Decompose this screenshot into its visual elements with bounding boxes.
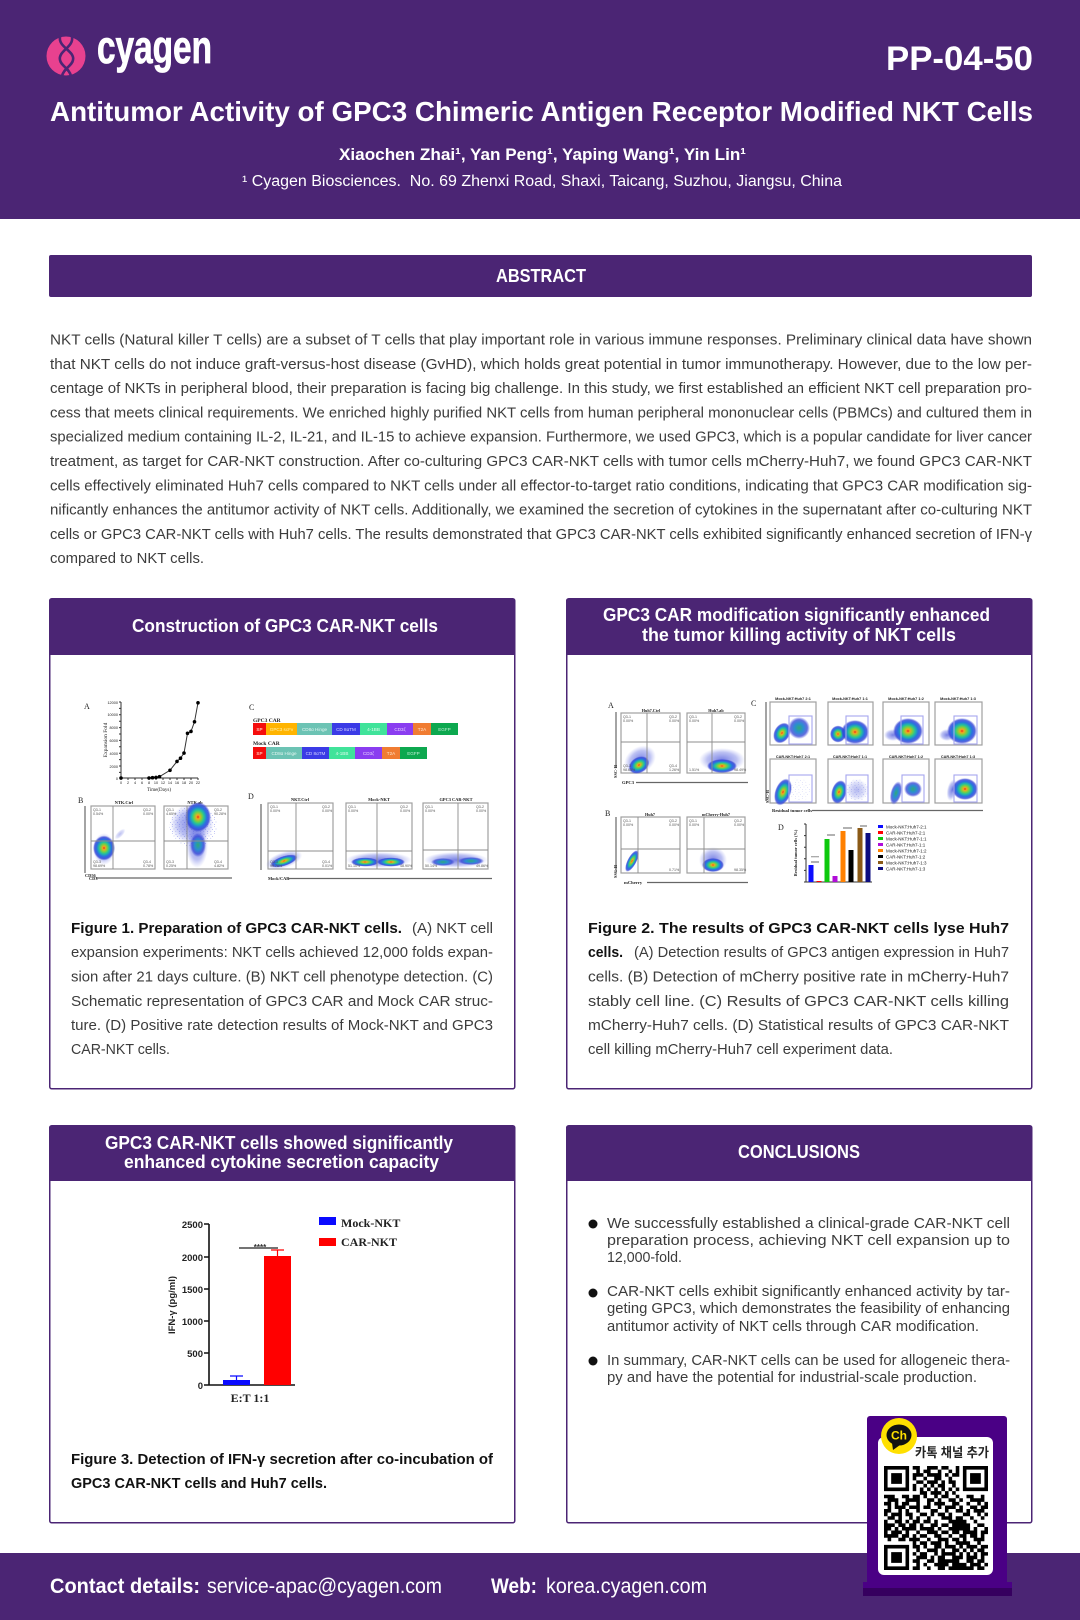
chart C: killing flow plots: Mock-NKT:Huh7 1:2	[888, 697, 924, 701]
chart: IFN-gamma secretion: IFN-γ (pg/ml)	[167, 1276, 178, 1334]
figure 2 caption: stably cell line. (C) Results of GPC3 CAR-NKT cells killing	[588, 993, 1009, 1010]
chart D: CAR positive rate flow plots: Q3-2	[400, 805, 408, 809]
chart A: expansion curve: 6	[141, 781, 143, 785]
chart B: mCherry flow plots: 98.35%	[734, 868, 747, 872]
conclusion 1: 12,000-fold.	[607, 1250, 682, 1266]
chart D: CAR positive rate flow plots: 0.00%	[322, 809, 333, 813]
contact details	[50, 1575, 442, 1598]
chart A: GPC3 expression flow plots: 0.00%	[689, 719, 700, 723]
chart B: NKT phenotype flow plots: 0.54%	[93, 812, 104, 816]
chart C: killing flow plots: Residual tumor cells	[772, 808, 812, 813]
chart A: GPC3 expression flow plots: GPC3	[622, 780, 635, 785]
chart A: expansion curve: 12000	[107, 701, 118, 705]
chart A: expansion curve: 8000	[110, 726, 118, 730]
chart A: GPC3 expression flow plots: 0.00%	[734, 719, 745, 723]
chart B: NKT phenotype flow plots: Q3-3	[93, 860, 101, 864]
panel: conclusions	[566, 1126, 1032, 1523]
chart D legend: CAR-NKT:Huh7-1:3	[886, 866, 926, 872]
chart B: mCherry flow plots: 0.00%	[669, 823, 680, 827]
chart D: CAR positive rate flow plots: D	[248, 792, 254, 801]
chart C: killing flow plots: CAR-NKT:Huh7 2:1	[776, 755, 810, 759]
chart B: NKT phenotype flow plots: 0.25%	[166, 864, 177, 868]
chart B: NKT phenotype flow plots: 4.65%	[166, 812, 177, 816]
chart legend: Mock-NKT	[341, 1216, 400, 1230]
chart B: NKT phenotype flow plots: Q3-3	[166, 860, 174, 864]
chart A: GPC3 expression flow plots: Q3-2	[734, 715, 742, 719]
chart D: CAR positive rate flow plots: Q3-3	[270, 860, 278, 864]
chart A: expansion curve: 16	[175, 781, 179, 785]
chart: IFN-gamma secretion: 2500	[182, 1220, 203, 1231]
figure 2 caption: Figure 2. The results of GPC3 CAR-NKT cells lyse Huh7	[588, 920, 1009, 937]
chart D: residual tumor cells bars: D	[778, 823, 784, 832]
chart A: expansion curve: A	[84, 702, 90, 711]
chart B: NKT phenotype flow plots: 0.00%	[143, 812, 154, 816]
chart B: mCherry flow plots: mCherry-Huh7	[702, 812, 730, 817]
chart B: NKT phenotype flow plots: B	[78, 796, 83, 805]
chart D: CAR positive rate flow plots: 0.00%	[400, 809, 411, 813]
chart B: NKT phenotype flow plots: CD56	[85, 873, 97, 878]
panel: tumor killing activity	[566, 599, 1032, 1089]
figure 1 caption: sion after 21 days culture. (B) NKT cell phenotype detection. (C)	[71, 968, 493, 986]
figure 1 caption: Figure 1. Preparation of GPC3 CAR-NKT cells.	[71, 920, 402, 937]
diagram C: CAR structure: CD8α Hinge	[302, 727, 328, 732]
chart D: CAR positive rate flow plots: Q3-2	[322, 805, 330, 809]
diagram C: CAR structure: SP	[256, 727, 263, 732]
chart A: GPC3 expression flow plots: 1.26%	[669, 768, 680, 772]
chart A: expansion curve: 12	[161, 781, 165, 785]
chart: IFN-gamma secretion: E:T 1:1	[231, 1391, 269, 1405]
bar: Mock-NKT	[223, 1376, 250, 1385]
chart D: CAR positive rate flow plots: 49.86%	[476, 864, 489, 868]
diagram C: CAR structure: CD3ζ	[394, 727, 406, 733]
conclusion 3: py and have the potential for industrial-scale production.	[607, 1370, 977, 1386]
chart B: mCherry flow plots: Q3-2	[734, 819, 742, 823]
chart A: expansion curve: Time(Days)	[147, 788, 171, 793]
chart D: CAR positive rate flow plots: 51.10%	[348, 864, 361, 868]
chart A: GPC3 expression flow plots: Q3-2	[669, 715, 677, 719]
diagram C: CAR structure: T2A	[387, 751, 396, 756]
chart B: mCherry flow plots: 0.00%	[623, 823, 634, 827]
chart D legend: CAR-NKT:Huh7-1:1	[886, 842, 926, 848]
figure 1 caption: CAR-NKT cells.	[71, 1041, 170, 1058]
abstract text: cess that meets clinical requirements. We enriched highly purified NKT cells from human peripheral mononuclear cells (PBMCs) and cultured them in	[50, 404, 1032, 421]
conclusion 3: In summary, CAR-NKT cells can be used for allogeneic thera-	[607, 1353, 1010, 1369]
chart A: GPC3 expression flow plots: 1.51%	[689, 768, 700, 772]
diagram C: CAR structure: T2A	[418, 727, 427, 732]
chart C: killing flow plots: CAR-NKT:Huh7 1:3	[941, 755, 975, 759]
conclusion 1: preparation process, achieving NKT cell expansion up to	[607, 1233, 1010, 1249]
QR code	[884, 1466, 988, 1570]
diagram C: CAR structure: Mock CAR	[253, 741, 281, 747]
contact details: Contact details:	[50, 1575, 200, 1598]
chart D: CAR positive rate flow plots: NKT.Ctrl	[291, 797, 310, 802]
chart D: CAR positive rate flow plots: 0.01%	[322, 864, 333, 868]
chart A: expansion curve: 6000	[110, 739, 118, 743]
chart C: killing flow plots: CAR-NKT:Huh7 1:1	[833, 755, 867, 759]
chart A: GPC3 expression flow plots	[608, 701, 748, 785]
abstract text: cells effectively eliminated Huh7 cells compared to NKT cells under all effector-to-target ratio conditions, indicating that GPC3 CAR modification sig-	[50, 477, 1032, 494]
chart D: CAR positive rate flow plots: 0.00%	[425, 809, 436, 813]
header band	[0, 0, 1080, 219]
icon: KakaoTalk channel badge	[881, 1418, 917, 1454]
chart B: mCherry flow plots: mCherry	[624, 880, 643, 885]
diagram C: CAR structure: C	[249, 703, 254, 712]
chart: IFN-gamma secretion: 2000	[182, 1253, 203, 1264]
logo: cyagen	[46, 21, 212, 76]
panel: construction of GPC3 CAR-NKT cells	[49, 599, 515, 1089]
chart B: NKT phenotype flow plots: 90.28%	[214, 812, 227, 816]
conclusion 3	[588, 1353, 1010, 1386]
chart B: NKT phenotype flow plots: Q3-1	[93, 808, 101, 812]
chart A: GPC3 expression flow plots: Q3-1	[689, 715, 697, 719]
chart B: mCherry flow plots	[605, 809, 748, 885]
conclusion 2: CAR-NKT cells exhibit significantly enhanced activity by tar-	[607, 1284, 1010, 1300]
chart D: CAR positive rate flow plots: 50.14%	[425, 864, 438, 868]
panel: cytokine secretion	[49, 1126, 515, 1523]
affiliation: ¹ Cyagen Biosciences. No. 69 Zhenxi Road, Shaxi, Taicang, Suzhou, Jiangsu, China	[242, 173, 842, 190]
chart A: expansion curve	[84, 701, 200, 793]
abstract text	[50, 332, 1032, 567]
chart B: mCherry flow plots: B	[605, 809, 610, 818]
figure 1 caption: expansion experiments: NKT cells achieved 12,000 folds expan-	[71, 944, 493, 961]
figure 3 caption	[71, 1451, 494, 1492]
panel heading: the tumor killing activity of NKT cells	[642, 625, 956, 645]
panel heading: Construction of GPC3 CAR-NKT cells	[132, 616, 438, 636]
QR code stand	[863, 1416, 1012, 1596]
title: Antitumor Activity of GPC3 Chimeric Antigen Receptor Modified NKT Cells	[50, 96, 1033, 127]
abstract text: nificantly enhances the antitumor activity of NKT cells. Additionally, we examined the secretion of cytokines in the supernatant after co-culturing NKT	[50, 502, 1032, 519]
contact details: service-apac@cyagen.com	[207, 1575, 442, 1598]
conclusion 1	[588, 1216, 1010, 1266]
chart B: NKT phenotype flow plots: Q3-4	[214, 860, 222, 864]
figure 2 caption: (A) Detection results of GPC3 antigen expression in Huh7	[634, 944, 1009, 961]
chart B: mCherry flow plots: 0.00%	[734, 823, 745, 827]
chart: IFN-gamma secretion	[167, 1216, 400, 1405]
chart D: CAR positive rate flow plots: 99.78%	[270, 864, 283, 868]
diagram C: CAR structure	[249, 703, 458, 759]
figure 2 caption: cells. (B) Detection of mCherry positive rate in mCherry-Huh7	[588, 968, 1009, 986]
conclusion 2: antitumor activity of NKT cells through CAR modification.	[607, 1319, 979, 1335]
chart D: residual tumor cells bars	[778, 823, 927, 882]
diagram C: CAR structure: CD8α Hinge	[271, 751, 297, 756]
chart D: CAR positive rate flow plots: Q3-1	[348, 805, 356, 809]
chart B: NKT phenotype flow plots	[78, 796, 232, 881]
figure 2 caption: mCherry-Huh7 cells. (D) Statistical results of GPC3 CAR-NKT	[588, 1017, 1009, 1034]
QR label: 카톡 채널 추가	[915, 1445, 989, 1460]
chart A: GPC3 expression flow plots: 98.65%	[623, 768, 636, 772]
logo: cyagen: cyagen	[97, 21, 212, 73]
chart B: mCherry flow plots: SSC-H	[613, 864, 618, 878]
diagram C: CAR structure: EGFP	[407, 751, 420, 756]
chart A: expansion curve: 8	[148, 781, 150, 785]
chart D: CAR positive rate flow plots: Mock/CAR	[268, 876, 290, 881]
authors: Xiaochen Zhai¹, Yan Peng¹, Yaping Wang¹, Yin Lin¹	[339, 145, 746, 164]
chart A: expansion curve: 2	[127, 781, 129, 785]
chart A: expansion curve: 10000	[107, 713, 118, 717]
abstract heading: ABSTRACT	[496, 266, 586, 286]
chart A: expansion curve: 4	[134, 781, 136, 785]
website: korea.cyagen.com	[546, 1575, 707, 1598]
bar: CAR-NKT	[264, 1250, 291, 1385]
figure 1 caption: ture. (D) Positive rate detection results of Mock-NKT and GPC3	[71, 1017, 493, 1034]
diagram C: CAR structure: CD 8αTM	[306, 751, 326, 756]
chart A: expansion curve: 0	[120, 781, 122, 785]
chart C: killing flow plots: CAR-NKT:Huh7 1:2	[889, 755, 923, 759]
diagram C: CAR structure: EGFP	[438, 727, 451, 732]
figure 2	[605, 697, 983, 885]
chart: IFN-gamma secretion: ****	[254, 1243, 267, 1252]
chart D: residual tumor cells bars: ****	[811, 855, 819, 860]
chart A: GPC3 expression flow plots: A	[608, 701, 614, 710]
figure 1 caption	[71, 920, 493, 1058]
diagram C: CAR structure: SP	[256, 751, 263, 756]
abstract text: NKT cells (Natural killer T cells) are a subset of T cells that play important role in various immune responses. Preliminary clinical data have shown	[50, 332, 1032, 348]
chart A: GPC3 expression flow plots: Q3-4	[669, 764, 677, 768]
panel heading	[105, 1133, 453, 1172]
chart D legend	[878, 824, 927, 872]
chart: IFN-gamma secretion: 1000	[182, 1317, 203, 1328]
chart A: GPC3 expression flow plots: SSC-H	[613, 764, 618, 778]
chart B: mCherry flow plots: Q3-2	[669, 819, 677, 823]
chart B: NKT phenotype flow plots: Q3-2	[214, 808, 222, 812]
chart B: NKT phenotype flow plots: CD3	[89, 876, 98, 881]
chart D: CAR positive rate flow plots: Mock-NKT	[368, 797, 390, 802]
chart A: GPC3 expression flow plots: Q3-1	[623, 715, 631, 719]
chart D: CAR positive rate flow plots: Q3-1	[425, 805, 433, 809]
chart D: CAR positive rate flow plots: Q3-2	[476, 805, 484, 809]
figure 2 caption: cell killing mCherry-Huh7 cell experiment data.	[588, 1041, 893, 1058]
icon: KakaoTalk channel badge: Ch	[891, 1428, 907, 1442]
chart C: killing flow plots	[751, 697, 983, 813]
chart B: mCherry flow plots: Huh7	[645, 812, 655, 817]
chart A: expansion curve: 18	[182, 781, 186, 785]
chart D: CAR positive rate flow plots: GPC3 CAR-NKT	[439, 797, 473, 802]
chart B: mCherry flow plots: Q3-1	[623, 819, 631, 823]
chart legend: CAR-NKT	[341, 1235, 397, 1249]
chart D: CAR positive rate flow plots: Q3-4	[322, 860, 330, 864]
chart B: NKT phenotype flow plots: NTK.Ctrl	[115, 800, 134, 805]
chart A: GPC3 expression flow plots: Huh7.ab	[708, 708, 724, 713]
chart D legend: Mock-NKT:Huh7-1:3	[886, 860, 927, 866]
chart C: killing flow plots: Mock-NKT:Huh7 2:1	[775, 697, 811, 701]
chart A: GPC3 expression flow plots: 0.00%	[669, 719, 680, 723]
chart A: GPC3 expression flow plots: Huh7.Ctrl	[642, 708, 661, 713]
chart C: killing flow plots: Mock-NKT:Huh7 1:3	[940, 697, 976, 701]
abstract text: that NKT cells do not induce graft-versus-host disease (GvHD), which holds great potential in tumor immunotherapy. However, due to the low per-	[50, 356, 1032, 373]
chart A: expansion curve: Expansion Fold	[103, 722, 109, 757]
figure 2 caption	[588, 920, 1009, 1058]
abstract text: treatment, as target for CAR-NKT construction. After co-culturing GPC3 CAR-NKT cells with tumor cells mCherry-Huh7, we found GPC3 CAR-NKT	[50, 453, 1032, 470]
chart B: NKT phenotype flow plots: Q3-4	[143, 860, 151, 864]
chart D legend: Mock-NKT:Huh7-1:2	[886, 848, 927, 854]
figure 1 caption: Schematic representation of GPC3 CAR and Mock CAR struc-	[71, 993, 493, 1010]
figure 1	[78, 701, 492, 881]
panel heading: CONCLUSIONS	[738, 1142, 860, 1162]
chart A: GPC3 expression flow plots: Q3-3	[623, 764, 631, 768]
chart D: CAR positive rate flow plots: 0.00%	[348, 809, 359, 813]
chart B: NKT phenotype flow plots: Q3-1	[166, 808, 174, 812]
chart A: expansion curve: 22	[196, 781, 200, 785]
chart: IFN-gamma secretion: 1500	[182, 1285, 203, 1296]
chart D: CAR positive rate flow plots: 48.90%	[400, 864, 413, 868]
chart D: CAR positive rate flow plots: 0.00%	[476, 809, 487, 813]
chart B: mCherry flow plots: Q3-1	[689, 819, 697, 823]
website: Web:	[491, 1575, 537, 1598]
chart A: expansion curve: 20	[189, 781, 193, 785]
diagram C: CAR structure: 4-1BB	[336, 751, 348, 756]
chart D: CAR positive rate flow plots	[248, 792, 492, 881]
abstract heading	[49, 255, 1032, 297]
chart B: mCherry flow plots: 0.71%	[669, 868, 680, 872]
panel heading: GPC3 CAR-NKT cells showed significantly	[105, 1133, 453, 1153]
chart B: NKT phenotype flow plots: 98.69%	[93, 864, 106, 868]
chart D legend: Mock-NKT:Huh7-1:1	[886, 836, 927, 842]
chart B: NKT phenotype flow plots: NTK.ab	[187, 800, 203, 805]
chart legend	[319, 1216, 400, 1249]
diagram C: CAR structure: GPC3 CAR	[253, 718, 282, 724]
conclusion 2: geting GPC3, which demonstrates the feasibility of enhancing	[607, 1301, 1010, 1317]
panel heading: enhanced cytokine secretion capacity	[124, 1152, 439, 1172]
chart A: expansion curve: 0	[116, 777, 118, 781]
diagram C: CAR structure: CD 8αTM	[336, 727, 356, 732]
chart C: killing flow plots: SSC-H	[765, 789, 770, 803]
chart D legend: CAR-NKT:Huh7-2:1	[886, 830, 926, 836]
chart C: killing flow plots: C	[751, 699, 756, 708]
abstract text: cells or GPC3 CAR-NKT cells with Huh7 cells. The results demonstrated that GPC3 CAR-NKT cells exhibited significantly enhanced secretion of IFN-γ	[50, 526, 1032, 543]
diagram C: CAR structure: 4-1BB	[367, 727, 380, 732]
diagram C: CAR structure: GPC3 scFv	[270, 727, 294, 732]
chart A: GPC3 expression flow plots: 98.49%	[734, 768, 747, 772]
chart D legend: Mock-NKT:Huh7-2:1	[886, 824, 927, 830]
chart C: killing flow plots: Mock-NKT:Huh7 1:1	[832, 697, 868, 701]
figure 2 caption: cells.	[588, 944, 623, 961]
chart: IFN-gamma secretion: 0	[198, 1381, 203, 1392]
abstract text: compared to NKT cells.	[50, 550, 204, 567]
panel heading: GPC3 CAR modification significantly enhanced	[603, 605, 990, 625]
footer band	[0, 1553, 1080, 1620]
chart D: CAR positive rate flow plots: Q3-1	[270, 805, 278, 809]
chart A: expansion curve: 14	[168, 781, 172, 785]
panel heading	[603, 605, 990, 645]
poster number: PP-04-50	[886, 40, 1033, 78]
abstract text: centage of NKTs in peripheral blood, their preparation is facing big challenge. In this study, we first established an efficient NKT cell preparation pro-	[50, 380, 1032, 397]
abstract text: specialized medium containing IL-2, IL-21, and IL-15 to achieve expansion. Furthermore, we used GPC3, which is a popular candidate for liver cancer	[50, 429, 1032, 446]
chart B: NKT phenotype flow plots: Q3-2	[143, 808, 151, 812]
conclusion 1: We successfully established a clinical-grade CAR-NKT cell	[607, 1216, 1010, 1232]
chart: IFN-gamma secretion: 500	[187, 1349, 203, 1360]
chart D: CAR positive rate flow plots: 0.00%	[270, 809, 281, 813]
chart A: expansion curve: 10	[154, 781, 158, 785]
diagram C: CAR structure: CD3ζ	[363, 751, 374, 757]
figure 3 caption: Figure 3. Detection of IFN-γ secretion after co-incubation of	[71, 1451, 494, 1468]
chart A: expansion curve: 2000	[110, 765, 118, 769]
chart A: GPC3 expression flow plots: 0.00%	[623, 719, 634, 723]
chart B: NKT phenotype flow plots: 0.78%	[143, 864, 154, 868]
figure 3 caption: GPC3 CAR-NKT cells and Huh7 cells.	[71, 1475, 327, 1492]
chart A: expansion curve: 4000	[110, 752, 118, 756]
chart D: residual tumor cells bars: Residual tumor cells (%)	[793, 829, 798, 876]
chart B: mCherry flow plots: 0.00%	[689, 823, 700, 827]
conclusion 2	[588, 1284, 1010, 1335]
chart B: NKT phenotype flow plots: 4.82%	[214, 864, 225, 868]
chart D legend: CAR-NKT:Huh7-1:2	[886, 854, 926, 860]
figure 1 caption: (A) NKT cell	[412, 920, 493, 937]
